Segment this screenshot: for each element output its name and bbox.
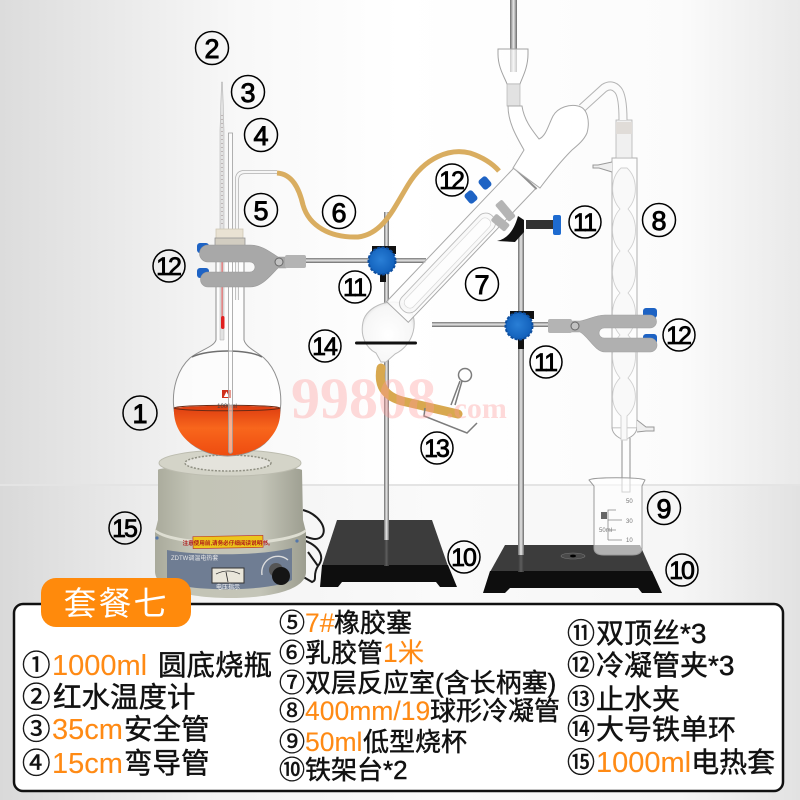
watermark: 99808 .com — [291, 366, 507, 431]
bent guide tube — [237, 172, 277, 300]
label 11 upper right: 11 — [573, 209, 596, 237]
parts list column 1: 15cm — [52, 748, 123, 780]
parts list column 2: ⑨ — [279, 727, 305, 757]
parts list column 2: ⑥ — [279, 638, 305, 668]
label 8: 8 — [651, 206, 667, 236]
label 10 left: 10 — [451, 544, 476, 572]
label 6: 6 — [331, 198, 347, 228]
label 8 — [642, 204, 676, 236]
label 12 left: 12 — [156, 253, 181, 281]
label 12 right — [663, 319, 695, 351]
label 11 middle: 11 — [534, 349, 557, 377]
label 11 upper right — [569, 206, 601, 238]
label 3 — [232, 76, 264, 108]
funnel stopper rod — [498, 0, 528, 106]
parts list column 3: ⑪ — [567, 618, 595, 649]
safety tube — [228, 133, 232, 454]
double layer reaction chamber — [362, 105, 588, 362]
parts list column 2: 7# — [305, 608, 335, 638]
top bulb and Y branch — [508, 105, 588, 188]
label 11 left: 11 — [343, 274, 366, 302]
lower body — [386, 167, 537, 323]
flask logo: 1000ml — [217, 404, 237, 410]
parts list panel — [14, 604, 783, 791]
parts list column 1: 圆底烧瓶 — [158, 650, 272, 682]
parts list column 1: ① — [22, 650, 51, 682]
parts list column 2: ⑧ — [279, 696, 305, 726]
parts list column 3: 冷凝管夹*3 — [596, 650, 734, 681]
parts list column 1: ② — [22, 682, 51, 714]
label 11 left — [339, 271, 371, 303]
boss head with knob left — [368, 246, 396, 282]
beaker: 50ml — [599, 528, 612, 534]
clamp left — [197, 243, 306, 287]
panel labels: 电压指示 — [216, 583, 240, 591]
label 12 left — [153, 250, 185, 282]
latex tube upper — [277, 152, 499, 237]
iron ring — [355, 342, 417, 344]
voltmeter — [212, 568, 244, 583]
label 13: 13 — [424, 435, 449, 463]
parts list column 3: 双顶丝*3 — [596, 618, 706, 649]
upper water port — [593, 162, 612, 172]
red water thermometer — [220, 82, 224, 340]
panel labels — [171, 554, 240, 591]
parts list column 3: 电热套 — [691, 747, 775, 778]
parts list column 2: 400mm/19 — [305, 696, 430, 726]
boss head upper with side knob — [497, 215, 561, 242]
lower bulb — [362, 302, 414, 362]
beaker: 30 — [626, 519, 633, 525]
parts list column 1: 安全管 — [124, 714, 210, 746]
label 12 top — [436, 164, 468, 196]
label 3: 3 — [240, 78, 256, 108]
outlet tube — [582, 86, 623, 120]
parts list column 2 — [279, 608, 560, 785]
label 9 — [648, 492, 680, 524]
iron stand left — [320, 212, 457, 587]
package badge: 套餐七 — [64, 585, 168, 622]
parts list column 1: ④ — [22, 748, 51, 780]
iron stand right — [483, 220, 662, 593]
parts list column 3: ⑭ — [567, 714, 595, 745]
label 10 right: 10 — [669, 557, 694, 585]
parts list column 3: 大号铁单环 — [596, 714, 736, 745]
label 12 right: 12 — [666, 322, 691, 350]
condenser tube — [593, 120, 654, 492]
label 10 right — [666, 554, 698, 586]
parts list column 1: ③ — [22, 714, 51, 746]
parts list column 2: ⑩ — [279, 755, 305, 785]
label 6 — [322, 196, 356, 228]
spherical inner bulbs — [612, 168, 636, 440]
label 15 — [109, 512, 141, 544]
parts list column 2: 1米 — [383, 638, 424, 668]
flask logo — [217, 390, 237, 410]
label 14: 14 — [312, 333, 338, 361]
parts list column 2: 球形冷凝管 — [430, 696, 560, 726]
parts list column 1: 红水温度计 — [53, 682, 196, 714]
round bottom flask with liquid — [173, 245, 281, 456]
lower water port — [637, 420, 654, 432]
label 15: 15 — [112, 515, 137, 543]
parts list column 3: 1000ml — [596, 747, 691, 779]
parts list column 1: 弯导管 — [124, 748, 210, 780]
label 14 — [309, 330, 341, 362]
label 5 — [244, 194, 278, 226]
parts list column 3: ⑫ — [567, 650, 595, 681]
label 12 top: 12 — [439, 167, 464, 195]
parts list column 2: 50ml — [305, 727, 362, 757]
heating mantle power cable — [300, 510, 324, 582]
clamp right arms — [548, 315, 657, 352]
label 7 — [466, 268, 498, 300]
latex tube lower — [380, 368, 458, 414]
boss head with knob middle — [506, 311, 534, 349]
label 4: 4 — [253, 121, 269, 151]
label 1: 1 — [132, 399, 148, 429]
label 10 left — [448, 541, 480, 573]
control knob — [262, 556, 290, 585]
beaker: 50 — [626, 499, 633, 505]
parts list column 2: 橡胶塞 — [334, 608, 412, 638]
clamp on reaction chamber — [463, 175, 516, 232]
parts list column 2: 双层反应室(含长柄塞) — [305, 668, 556, 698]
parts list column 2: ⑤ — [279, 608, 305, 638]
label 9: 9 — [656, 494, 672, 524]
parts list column 3: 止水夹 — [596, 684, 680, 715]
parts list column 1: 35cm — [52, 714, 123, 746]
parts list column 2: 低型烧杯 — [363, 727, 467, 757]
label 1 — [123, 396, 157, 430]
parts list column 2: 乳胶管 — [305, 638, 383, 668]
beaker — [589, 478, 645, 555]
package badge — [41, 578, 191, 627]
label 11 middle — [530, 346, 562, 378]
label 4 — [244, 118, 278, 152]
parts list column 3: ⑬ — [567, 684, 595, 715]
horizontal rods — [305, 258, 550, 327]
parts list column 3: ⑮ — [567, 747, 595, 778]
stopper — [215, 229, 245, 247]
pinch clamp — [424, 368, 477, 433]
clamp right tips — [643, 308, 657, 344]
heating mantle — [155, 450, 306, 598]
label 5: 5 — [253, 196, 269, 226]
label 7: 7 — [474, 270, 490, 300]
parts list column 1: 1000ml — [52, 650, 147, 682]
warning sticker: 注意使用前,请务必仔细阅读说明书。 — [182, 539, 274, 547]
parts list column 2: 铁架台*2 — [305, 755, 408, 785]
label 2 — [196, 32, 228, 64]
parts list column 2: ⑦ — [279, 668, 305, 698]
parts list column 1 — [22, 650, 272, 780]
label 2: 2 — [204, 34, 220, 64]
label 13 — [421, 432, 453, 464]
parts list column 3 — [567, 618, 775, 779]
warning sticker — [182, 535, 274, 549]
panel labels: ZDTW调温电热套 — [171, 554, 218, 562]
beaker: 10 — [626, 538, 633, 544]
